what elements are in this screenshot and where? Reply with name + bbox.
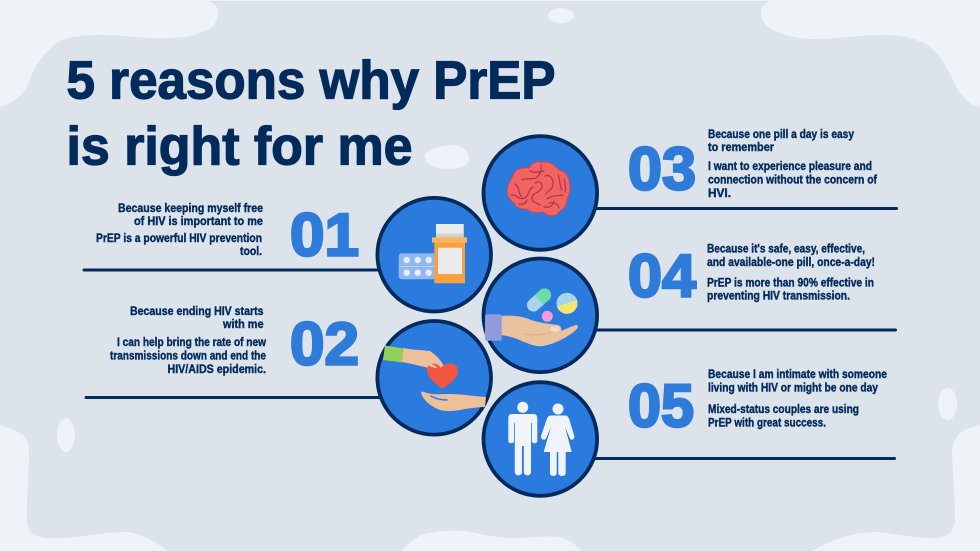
number 05: 05 — [628, 372, 694, 440]
title: is right for me — [66, 116, 412, 176]
text block 01: PrEP is a powerful HIV prevention — [96, 231, 262, 245]
icon: brain — [484, 136, 597, 250]
text block 04: Because it's safe, easy, effective, — [707, 242, 865, 256]
panel: reason 01 — [96, 201, 359, 268]
text block 01: of HIV is important to me — [134, 214, 263, 228]
icon: hand with pills — [484, 258, 597, 372]
number 01: 01 — [290, 202, 359, 268]
text block 03: connection without the concern of — [708, 172, 878, 186]
panel: reason 03 — [628, 127, 878, 202]
text block 04: PrEP is more than 90% effective in — [707, 276, 874, 290]
text block 05: Because I am intimate with someone — [708, 367, 887, 381]
text block 04: preventing HIV transmission. — [707, 288, 850, 302]
text block 01 — [96, 201, 263, 258]
number 04: 04 — [628, 242, 697, 310]
text block 05: living with HIV or might be one day — [708, 380, 878, 394]
panel: reason 04 — [628, 242, 875, 310]
text block 03 — [708, 127, 878, 200]
text block 02: HIV/AIDS epidemic. — [168, 362, 266, 376]
number 03: 03 — [628, 136, 696, 202]
icon: man and woman figures — [484, 382, 597, 496]
text block 04 — [707, 242, 875, 302]
connector lines — [84, 208, 896, 458]
text block 01: Because keeping myself free — [118, 201, 263, 215]
text block 03: I want to experience pleasure and — [708, 159, 872, 173]
title — [66, 50, 556, 176]
number 02: 02 — [290, 310, 359, 378]
text block 02: I can help bring the rate of new — [117, 335, 267, 349]
text block 05: PrEP with great success. — [708, 416, 826, 430]
title: 5 reasons why PrEP — [66, 50, 556, 110]
icon: hands with heart — [377, 321, 491, 435]
text block 04: and available-one pill, once-a-day! — [707, 255, 875, 269]
icon: pill bottle and blister pack — [377, 198, 491, 312]
text block 03: HVI. — [708, 186, 731, 200]
text block 05 — [708, 367, 887, 430]
text block 02: transmissions down and end the — [110, 348, 266, 362]
text block 02: Because ending HIV starts — [130, 304, 264, 318]
text block 03: to remember — [708, 140, 774, 154]
text block 02 — [110, 304, 267, 376]
text block 03: Because one pill a day is easy — [708, 127, 854, 141]
text block 02: with me — [222, 317, 264, 331]
panel: reason 02 — [110, 304, 359, 378]
panel: reason 05 — [628, 367, 887, 440]
text block 05: Mixed-status couples are using — [708, 402, 859, 416]
text block 01: tool. — [240, 244, 262, 258]
